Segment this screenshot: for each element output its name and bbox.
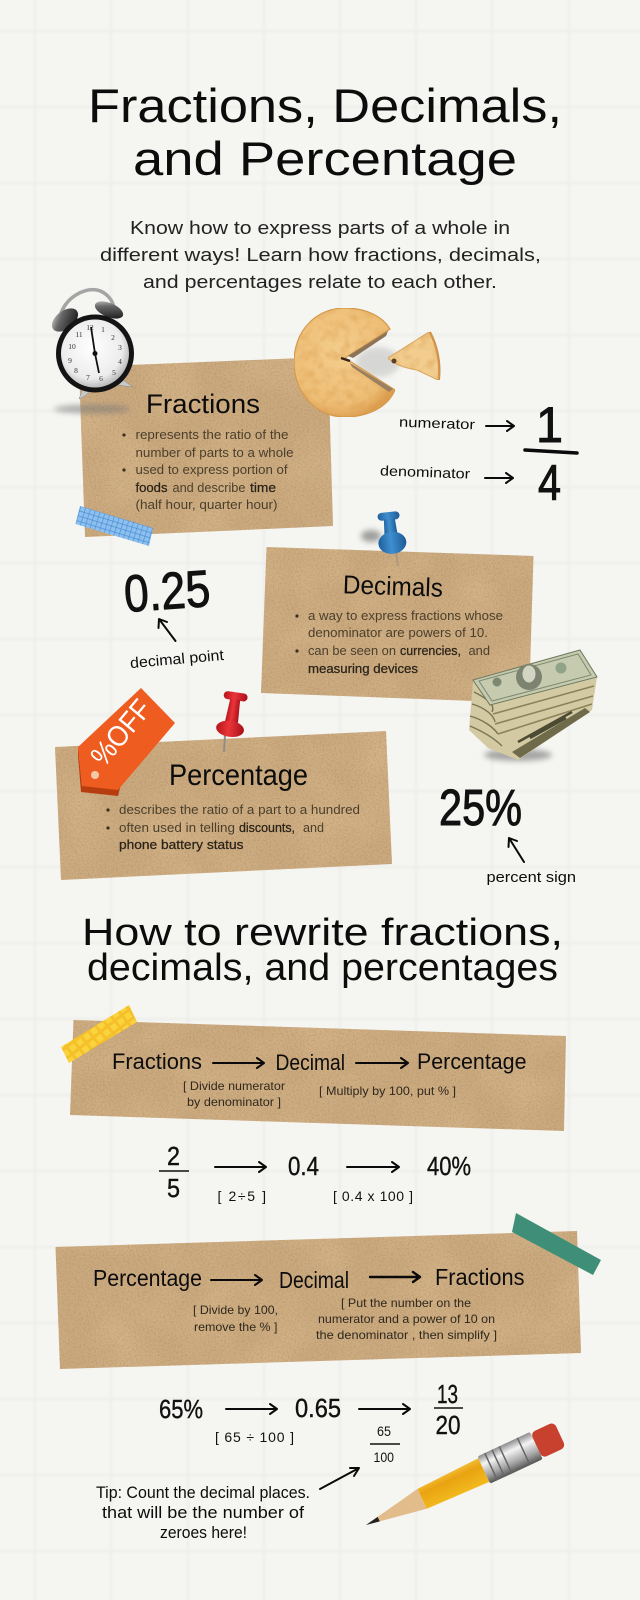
tip text: zeroes here! bbox=[160, 1523, 247, 1542]
arrow bbox=[213, 1058, 264, 1068]
bullet list bbox=[122, 427, 294, 512]
title: and Percentage bbox=[133, 132, 517, 185]
arrow bbox=[347, 1162, 399, 1172]
icon: blue washi tape bbox=[76, 506, 153, 546]
note: [ 0.4 x 100 ] bbox=[333, 1188, 413, 1204]
arrow bbox=[486, 421, 514, 431]
step notes: the denominator , then simplify ] bbox=[316, 1328, 497, 1342]
flow labels: Percentage bbox=[93, 1265, 202, 1291]
icon: alarm clock: 4 bbox=[118, 357, 122, 366]
tip text: that will be the number of bbox=[102, 1503, 304, 1522]
step notes bbox=[183, 1079, 456, 1109]
kraft paper note bbox=[79, 357, 333, 537]
decimal 0.4: 0.4 bbox=[288, 1151, 319, 1181]
bullet list: currencies, bbox=[400, 643, 461, 658]
bullet list: (half hour, quarter hour) bbox=[136, 497, 278, 512]
panel: fractions bbox=[79, 357, 333, 537]
fraction 13/20: 13 bbox=[437, 1379, 458, 1409]
bullet list: used to express portion of bbox=[136, 462, 288, 477]
bullet list: describes the ratio of a part to a hundred bbox=[119, 802, 360, 817]
step notes: by denominator ] bbox=[187, 1095, 281, 1109]
bullet list: and bbox=[468, 643, 490, 658]
arrow bbox=[485, 473, 513, 483]
icon: red push pin bbox=[215, 690, 249, 752]
flow labels: Fractions bbox=[112, 1049, 202, 1074]
fraction 2/5 bbox=[159, 1141, 189, 1203]
fraction 2/5: 5 bbox=[167, 1173, 180, 1203]
icon: alarm clock: 5 bbox=[112, 368, 116, 377]
fraction 65/100 bbox=[370, 1423, 400, 1465]
number 25%: 25% bbox=[439, 779, 522, 836]
arrow bbox=[211, 1275, 262, 1285]
bullet list: often used in telling bbox=[119, 820, 235, 835]
bullet list: represents the ratio of the bbox=[136, 427, 288, 442]
bullet list: can be seen on bbox=[308, 643, 396, 658]
intro text bbox=[100, 217, 541, 292]
step notes: [ Put the number on the bbox=[341, 1296, 471, 1310]
bullet list: measuring devices bbox=[308, 661, 419, 676]
heading: decimals: Decimals bbox=[342, 569, 443, 603]
bullet list: foods bbox=[136, 480, 168, 495]
kraft paper note bbox=[55, 731, 392, 880]
percentage example bbox=[439, 779, 576, 886]
tip text bbox=[96, 1483, 310, 1542]
label: numerator: numerator bbox=[399, 414, 476, 432]
title: Fractions, Decimals, bbox=[88, 79, 562, 132]
intro text: and percentages relate to each other. bbox=[143, 271, 497, 292]
bullet list: and bbox=[303, 820, 324, 835]
panel: decimals bbox=[261, 547, 534, 703]
bullet list: phone battery status bbox=[119, 837, 244, 852]
heading: how to rewrite: How to rewrite fractions, bbox=[82, 912, 563, 954]
flow labels: Fractions bbox=[435, 1264, 524, 1290]
arrow bbox=[359, 1404, 410, 1414]
fraction diagram bbox=[380, 397, 577, 511]
bullet list: number of parts to a whole bbox=[136, 445, 294, 460]
tip text: Tip: Count the decimal places. bbox=[96, 1483, 310, 1502]
bullet list: and describe bbox=[172, 480, 246, 495]
example: 65% to 13/20 bbox=[96, 1379, 463, 1542]
icon: alarm clock: 3 bbox=[118, 343, 122, 352]
arrow to percent sign bbox=[508, 838, 524, 862]
fraction 13/20: 20 bbox=[436, 1410, 460, 1440]
flow labels bbox=[93, 1264, 524, 1293]
bullet list bbox=[295, 608, 503, 676]
note: [ 2÷5 ] bbox=[218, 1188, 266, 1204]
icon: alarm clock: 1 bbox=[101, 325, 105, 334]
step notes: numerator and a power of 10 on bbox=[318, 1312, 495, 1326]
arrow bbox=[356, 1058, 408, 1068]
label: denominator: denominator bbox=[380, 462, 471, 482]
fraction 65/100: 65 bbox=[377, 1423, 391, 1439]
icon: alarm clock: 8 bbox=[74, 366, 78, 375]
fraction 13/20 bbox=[434, 1379, 463, 1440]
decimal example bbox=[122, 560, 225, 672]
arrow bbox=[370, 1272, 420, 1282]
kraft paper note bbox=[70, 1020, 566, 1131]
tag label: %OFF bbox=[85, 694, 158, 772]
fraction one quarter: 4 bbox=[538, 455, 561, 511]
flow labels bbox=[112, 1049, 526, 1075]
arrow bbox=[215, 1162, 266, 1172]
icon: orange discount tag bbox=[78, 688, 175, 796]
number 0.25: 0.25 bbox=[122, 560, 212, 624]
flow labels: Decimal bbox=[276, 1050, 345, 1075]
bullet list: a way to express fractions whose bbox=[308, 608, 503, 623]
fraction one quarter: 1 bbox=[536, 397, 563, 453]
arrow to decimal point bbox=[158, 619, 176, 641]
kraft paper note bbox=[261, 547, 534, 703]
step notes: [ Divide numerator bbox=[183, 1079, 285, 1093]
icon: alarm clock: 9 bbox=[68, 356, 72, 365]
heading: fractions: Fractions bbox=[146, 389, 260, 419]
step notes: [ Divide by 100, bbox=[193, 1303, 278, 1317]
icon: yellow washi tape bbox=[61, 1005, 137, 1063]
step notes: remove the % ] bbox=[194, 1320, 278, 1334]
icon: alarm clock: 12 bbox=[86, 323, 94, 332]
bullet list: time bbox=[250, 480, 276, 495]
fraction 2/5: 2 bbox=[167, 1141, 180, 1171]
heading: how to rewrite: decimals, and percentages bbox=[87, 947, 558, 989]
panel: percentage bbox=[55, 731, 392, 880]
step notes bbox=[193, 1296, 497, 1342]
bullet list: discounts, bbox=[239, 820, 295, 835]
example: 2/5 to 40% bbox=[159, 1141, 471, 1204]
arrow bbox=[226, 1404, 277, 1414]
icon: alarm clock: 10 bbox=[68, 342, 76, 351]
intro text: different ways! Learn how fractions, decimals, bbox=[100, 244, 541, 265]
icon: pencil bbox=[360, 1421, 566, 1539]
note: [ 65 ÷ 100 ] bbox=[215, 1429, 294, 1445]
percent 65%: 65% bbox=[159, 1394, 203, 1424]
icon: alarm clock: 6 bbox=[99, 374, 103, 383]
panel: fractions to percentage bbox=[70, 1020, 566, 1131]
kraft paper note bbox=[56, 1231, 581, 1369]
percent 40%: 40% bbox=[427, 1151, 471, 1181]
bullet list bbox=[106, 802, 360, 852]
heading: how to rewrite bbox=[82, 912, 563, 989]
panel: percentage to fractions bbox=[56, 1231, 581, 1369]
icon: stack of dollar bills bbox=[469, 650, 597, 761]
label: percent sign: percent sign bbox=[486, 869, 576, 886]
icon: pie with slice bbox=[294, 308, 440, 417]
icon: alarm clock: 11 bbox=[75, 330, 83, 339]
icon: alarm clock: 2 bbox=[111, 333, 115, 342]
title bbox=[88, 79, 562, 185]
icon: green tape bbox=[512, 1213, 601, 1275]
arrow to fraction bbox=[320, 1468, 359, 1489]
fraction 65/100: 100 bbox=[374, 1449, 394, 1465]
flow labels: Percentage bbox=[417, 1049, 526, 1074]
icon: alarm clock: 7 bbox=[86, 373, 90, 382]
flow labels: Decimal bbox=[279, 1267, 349, 1293]
bullet list: denominator are powers of 10. bbox=[308, 625, 488, 640]
step notes: [ Multiply by 100, put % ] bbox=[319, 1084, 456, 1098]
heading: percentage: Percentage bbox=[169, 759, 308, 792]
decimal 0.65: 0.65 bbox=[295, 1393, 341, 1423]
fraction one quarter bbox=[525, 397, 577, 511]
label: decimal point: decimal point bbox=[129, 647, 225, 672]
intro text: Know how to express parts of a whole in bbox=[130, 217, 510, 238]
icon: blue push pin bbox=[361, 511, 407, 566]
icon: alarm clock bbox=[48, 290, 134, 414]
